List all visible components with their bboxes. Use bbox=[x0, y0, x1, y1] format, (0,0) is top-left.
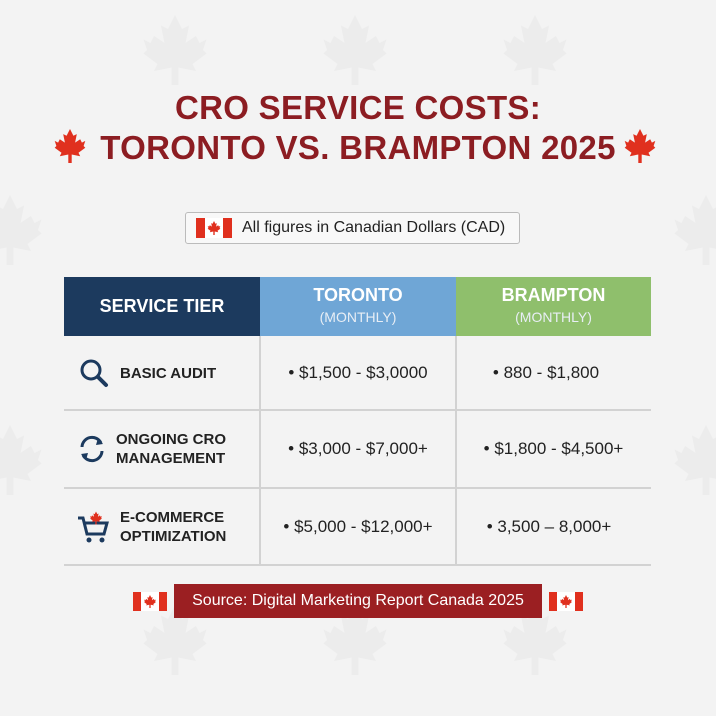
header: brampton bbox=[456, 277, 651, 336]
icon: flag left bbox=[133, 592, 167, 611]
icon: refresh bbox=[80, 436, 104, 462]
row: ongoing cro bbox=[80, 431, 226, 467]
row: ecommerce bbox=[78, 508, 226, 544]
source footer bbox=[133, 584, 583, 618]
row: ongoing cro: MANAGEMENT bbox=[116, 450, 225, 467]
icon: cart bbox=[78, 512, 109, 542]
icon: magnifier bbox=[80, 360, 108, 388]
currency note bbox=[185, 212, 520, 244]
title: CRO SERVICE COSTS: bbox=[175, 89, 541, 126]
currency note: All figures in Canadian Dollars (CAD) bbox=[242, 219, 505, 236]
row: basic audit: BASIC AUDIT bbox=[120, 364, 216, 382]
icon: flag right bbox=[549, 592, 583, 611]
header: brampton: BRAMPTON bbox=[502, 285, 605, 305]
row: ecommerce: E-COMMERCE bbox=[120, 508, 224, 526]
row: basic audit bbox=[80, 360, 216, 388]
icon: maple leaf left bbox=[54, 129, 86, 163]
header: service tier: SERVICE TIER bbox=[100, 296, 224, 316]
row: ecommerce: OPTIMIZATION bbox=[120, 528, 226, 544]
header: toronto: TORONTO bbox=[313, 285, 403, 305]
source banner bbox=[174, 584, 542, 618]
value: brampton basic: • 880 - $1,800 bbox=[493, 363, 599, 382]
header: toronto: (MONTHLY) bbox=[320, 309, 396, 325]
value: toronto ongoing: • $3,000 - $7,000+ bbox=[288, 439, 428, 458]
header: brampton: (MONTHLY) bbox=[515, 309, 592, 325]
source banner: Source: Digital Marketing Report Canada 2025 bbox=[192, 592, 524, 609]
value: brampton ecommerce: • 3,500 – 8,000+ bbox=[487, 516, 611, 536]
header: service tier bbox=[64, 277, 260, 336]
header: toronto bbox=[260, 277, 456, 336]
value: brampton ongoing: • $1,800 - $4,500+ bbox=[484, 439, 623, 458]
value: toronto basic: • $1,500 - $3,0000 bbox=[288, 363, 428, 382]
icon: canadian flag bbox=[196, 218, 232, 238]
icon: maple leaf right bbox=[624, 129, 656, 163]
value: toronto ecommerce: • $5,000 - $12,000+ bbox=[283, 516, 433, 536]
row: ongoing cro: ONGOING CRO bbox=[116, 431, 226, 448]
title: TORONTO VS. BRAMPTON 2025 bbox=[100, 129, 616, 166]
title bbox=[100, 89, 616, 166]
